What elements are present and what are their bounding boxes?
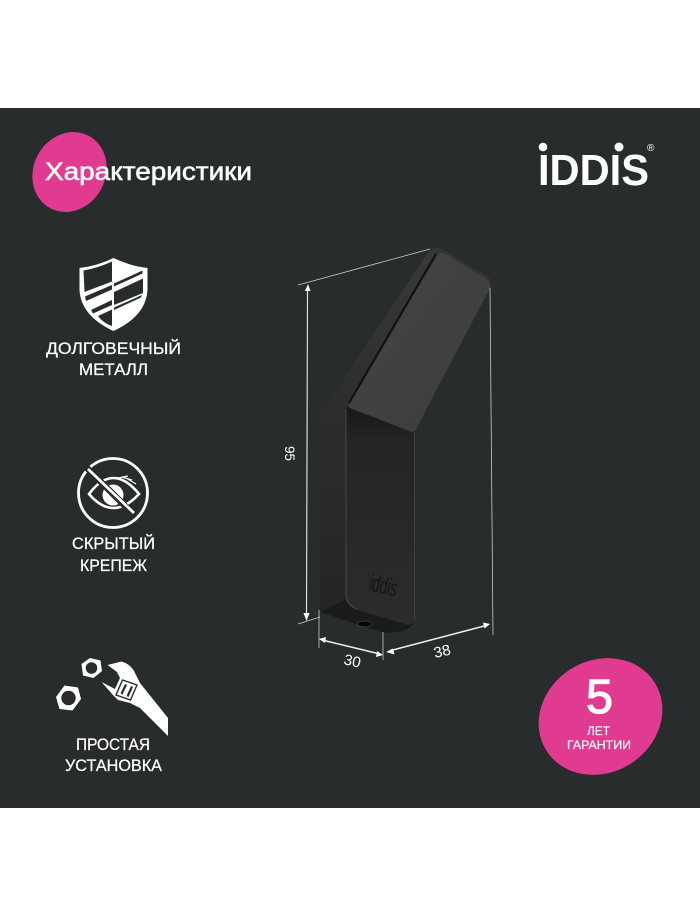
badge: 5-year warranty: ЛЕТ [587,724,611,738]
logo: IDDIS: IDDIS [538,146,649,195]
hook back plate [320,249,440,618]
label: durable metal [46,339,181,379]
hook engraved logo: iddis [367,570,400,603]
hook base [320,600,414,633]
dimension: width 38: 38 [432,642,452,662]
dimension: width 38 [386,622,490,662]
dimension lines [298,249,493,660]
dimension: height 95 [282,284,310,621]
dimension: depth 30: 30 [342,651,362,672]
label: durable metal: МЕТАЛЛ [79,361,148,379]
hook lower front face [346,407,414,625]
logo: IDDIS: ® [647,143,655,154]
label: hidden fastening: СКРЫТЫЙ [72,534,155,553]
label: durable metal: ДОЛГОВЕЧНЫЙ [46,339,181,358]
dark background panel [0,108,700,808]
icon: shield [80,258,148,331]
badge: 5-year warranty: ГАРАНТИИ [567,738,631,752]
label: hidden fastening: КРЕПЕЖ [80,557,148,575]
icon: crossed eye [78,458,148,528]
hook upper front face [349,253,490,432]
heading: characteristics [18,119,252,225]
dimension: depth 30 [319,637,383,672]
dimensions [282,249,493,672]
badge: 5-year warranty: 5 [586,671,613,724]
feature: hidden fastening [72,458,155,575]
dimension: height 95: 95 [282,446,298,461]
feature: durable metal [46,258,181,379]
label: simple installation: УСТАНОВКА [65,757,162,775]
hook top bevel [432,248,491,288]
label: hidden fastening [72,534,155,575]
product: black wall hook [320,248,491,633]
label: simple installation: ПРОСТАЯ [76,736,150,754]
feature: simple installation [56,658,168,775]
icon: nuts and wrench [56,658,168,736]
badge: 5-year warranty [517,635,684,798]
label: simple installation [65,736,162,775]
heading: characteristics: Характеристики [45,158,252,186]
